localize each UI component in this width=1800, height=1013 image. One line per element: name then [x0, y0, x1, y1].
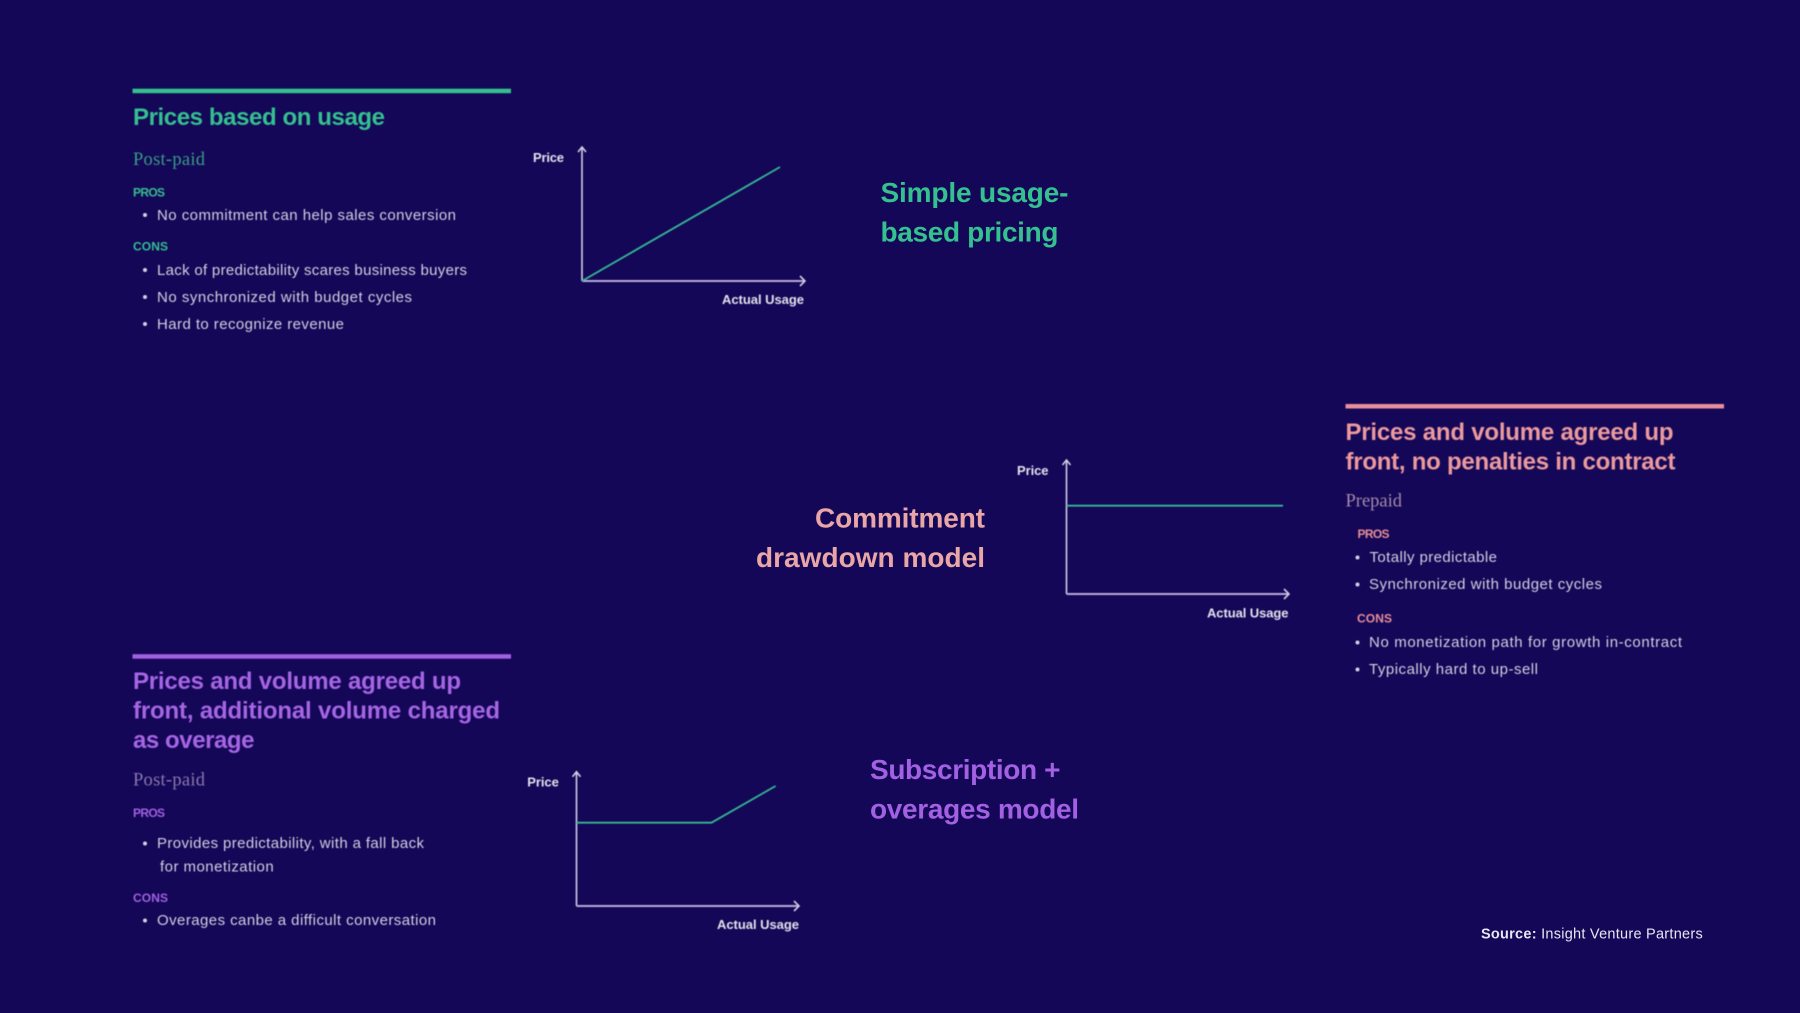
panel: commitment drawdown text	[1346, 404, 1724, 678]
list: pros	[1356, 549, 1602, 593]
title: commitment drawdown model: Commitment	[815, 502, 985, 534]
accent bar: pink	[1346, 404, 1724, 408]
chart: flat then rising price vs usage: Price	[527, 775, 559, 790]
chart: linear price vs usage: Price	[533, 150, 564, 165]
label: pros: PROS	[133, 186, 165, 200]
heading: prices and volume agreed, overage: Prices and volume agreed up	[133, 668, 461, 695]
list: cons: Overages canbe a difficult conversation	[157, 912, 436, 929]
panel: subscription plus overages text	[132, 654, 511, 929]
list: cons	[143, 262, 467, 333]
subheading: post-paid: Post-paid	[133, 770, 206, 790]
heading: prices based on usage: Prices based on usage	[133, 104, 385, 131]
list: pros: No commitment can help sales conversion	[157, 207, 456, 224]
heading: prices and volume agreed, overage: as overage	[133, 727, 254, 754]
chart: flat then rising price vs usage	[527, 772, 799, 932]
chart: flat price vs usage	[1017, 460, 1289, 621]
list: cons: Typically hard to up-sell	[1369, 661, 1538, 678]
label: pros: PROS	[133, 806, 165, 820]
accent bar: green	[132, 89, 511, 93]
title: subscription plus overages model: Subscription +	[870, 754, 1060, 785]
title: commitment drawdown model: drawdown model	[756, 542, 985, 573]
list: pros: Provides predictability, with a fall back	[157, 835, 424, 852]
chart: flat price vs usage: Price	[1017, 463, 1048, 478]
list: cons: Lack of predictability scares business buyers	[157, 262, 467, 279]
label: pros: PROS	[1358, 527, 1390, 541]
list: pros: for monetization	[160, 859, 274, 876]
heading: prices and volume agreed, no penalties: Prices and volume agreed up	[1346, 419, 1674, 446]
heading: prices and volume agreed, no penalties: front, no penalties in contract	[1346, 448, 1676, 476]
subheading: prepaid: Prepaid	[1346, 492, 1403, 512]
title: simple usage-based pricing: based pricing	[880, 216, 1058, 248]
list: cons: Hard to recognize revenue	[157, 316, 344, 333]
list: cons	[1356, 634, 1683, 678]
chart: flat price vs usage: Actual Usage	[1207, 606, 1288, 621]
title: subscription plus overages model: overages model	[870, 794, 1079, 824]
label: cons: CONS	[1357, 612, 1392, 626]
subheading: post-paid: Post-paid	[133, 150, 206, 170]
label: cons: CONS	[133, 891, 168, 905]
list: cons: No synchronized with budget cycles	[157, 289, 412, 306]
chart: linear price vs usage: Actual Usage	[722, 292, 804, 307]
list: cons: No monetization path for growth in-contract	[1369, 634, 1683, 651]
list: pros	[143, 835, 424, 876]
accent bar: purple	[132, 654, 511, 659]
panel: simple usage-based pricing text	[132, 89, 511, 333]
list: pros: Totally predictable	[1370, 549, 1497, 566]
chart: linear price vs usage	[533, 147, 805, 307]
source note: Source: Insight Venture Partners	[1481, 926, 1703, 942]
title: simple usage-based pricing: Simple usage-	[880, 177, 1068, 208]
heading: prices and volume agreed, overage: front, additional volume charged	[133, 698, 500, 725]
label: cons: CONS	[133, 240, 168, 254]
chart: flat then rising price vs usage: Actual Usage	[717, 917, 799, 932]
list: pros: Synchronized with budget cycles	[1369, 576, 1602, 593]
